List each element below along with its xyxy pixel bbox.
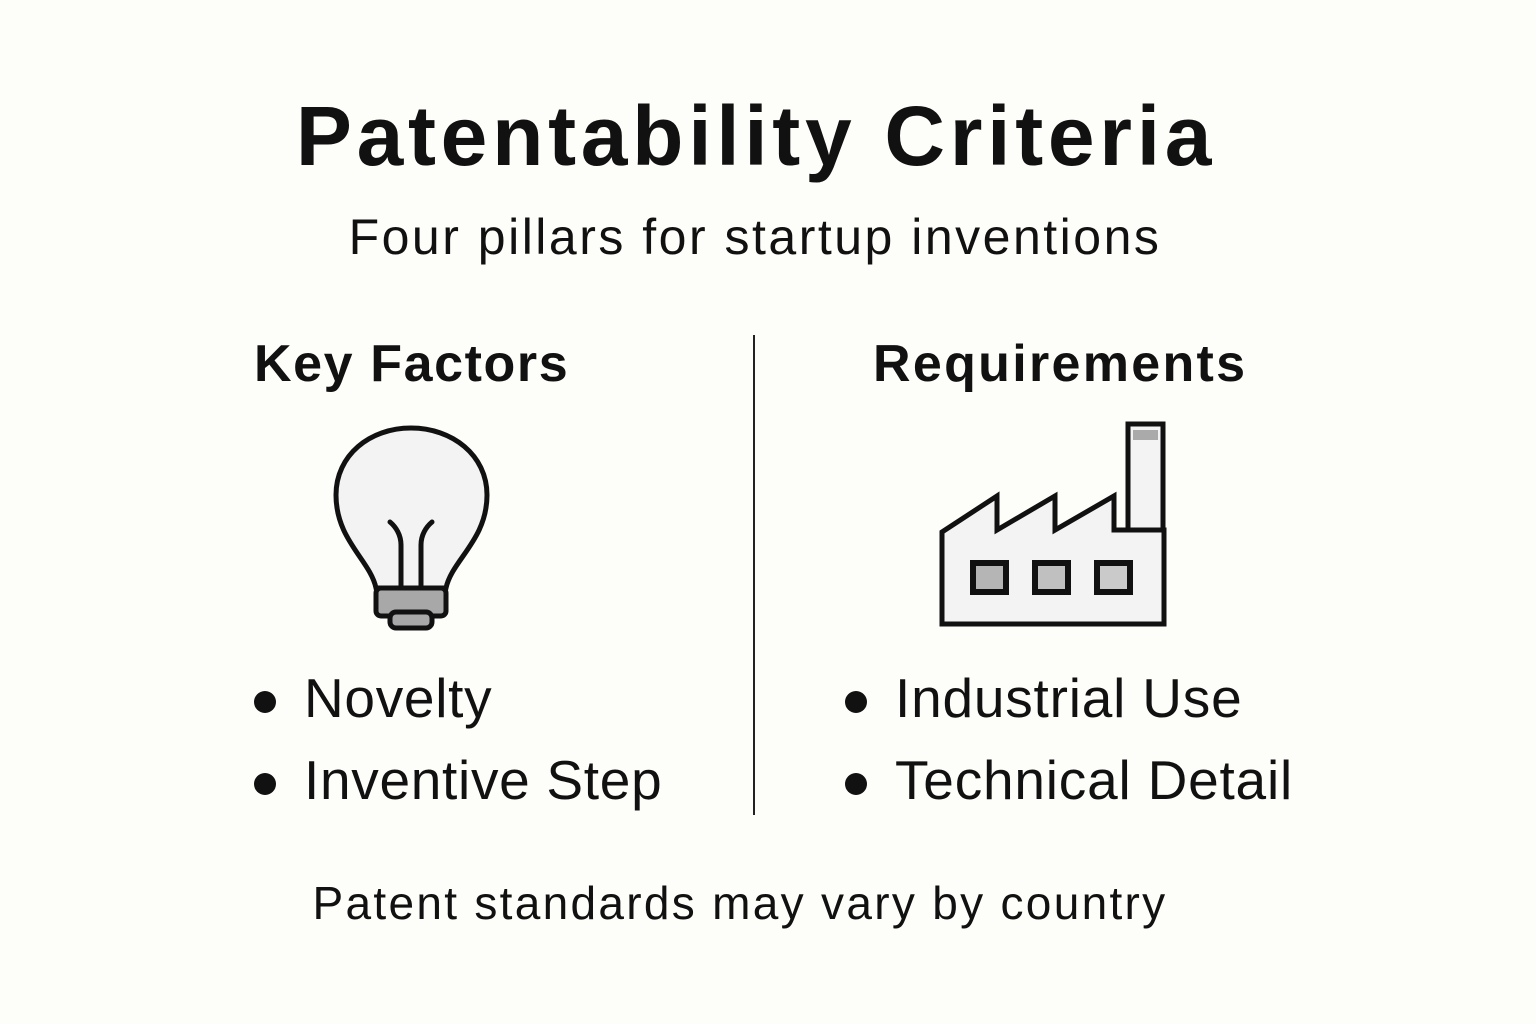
bullet: novelty: Novelty [304, 667, 492, 729]
subtitle: Four pillars for startup inventions [349, 209, 1161, 265]
title: Patentability Criteria [296, 89, 1216, 183]
icon: factory [940, 422, 1166, 626]
bullet: technical detail: Technical Detail [895, 749, 1293, 811]
bullet: industrial use: Industrial Use [895, 667, 1242, 729]
list: key factors [254, 667, 662, 811]
divider [753, 335, 755, 815]
heading: key factors: Key Factors [254, 335, 569, 393]
icon: light bulb [334, 426, 490, 630]
footer note: Patent standards may vary by country [313, 877, 1167, 929]
list: requirements [845, 667, 1293, 811]
heading: requirements: Requirements [873, 335, 1247, 393]
bullet: inventive step: Inventive Step [304, 749, 662, 811]
